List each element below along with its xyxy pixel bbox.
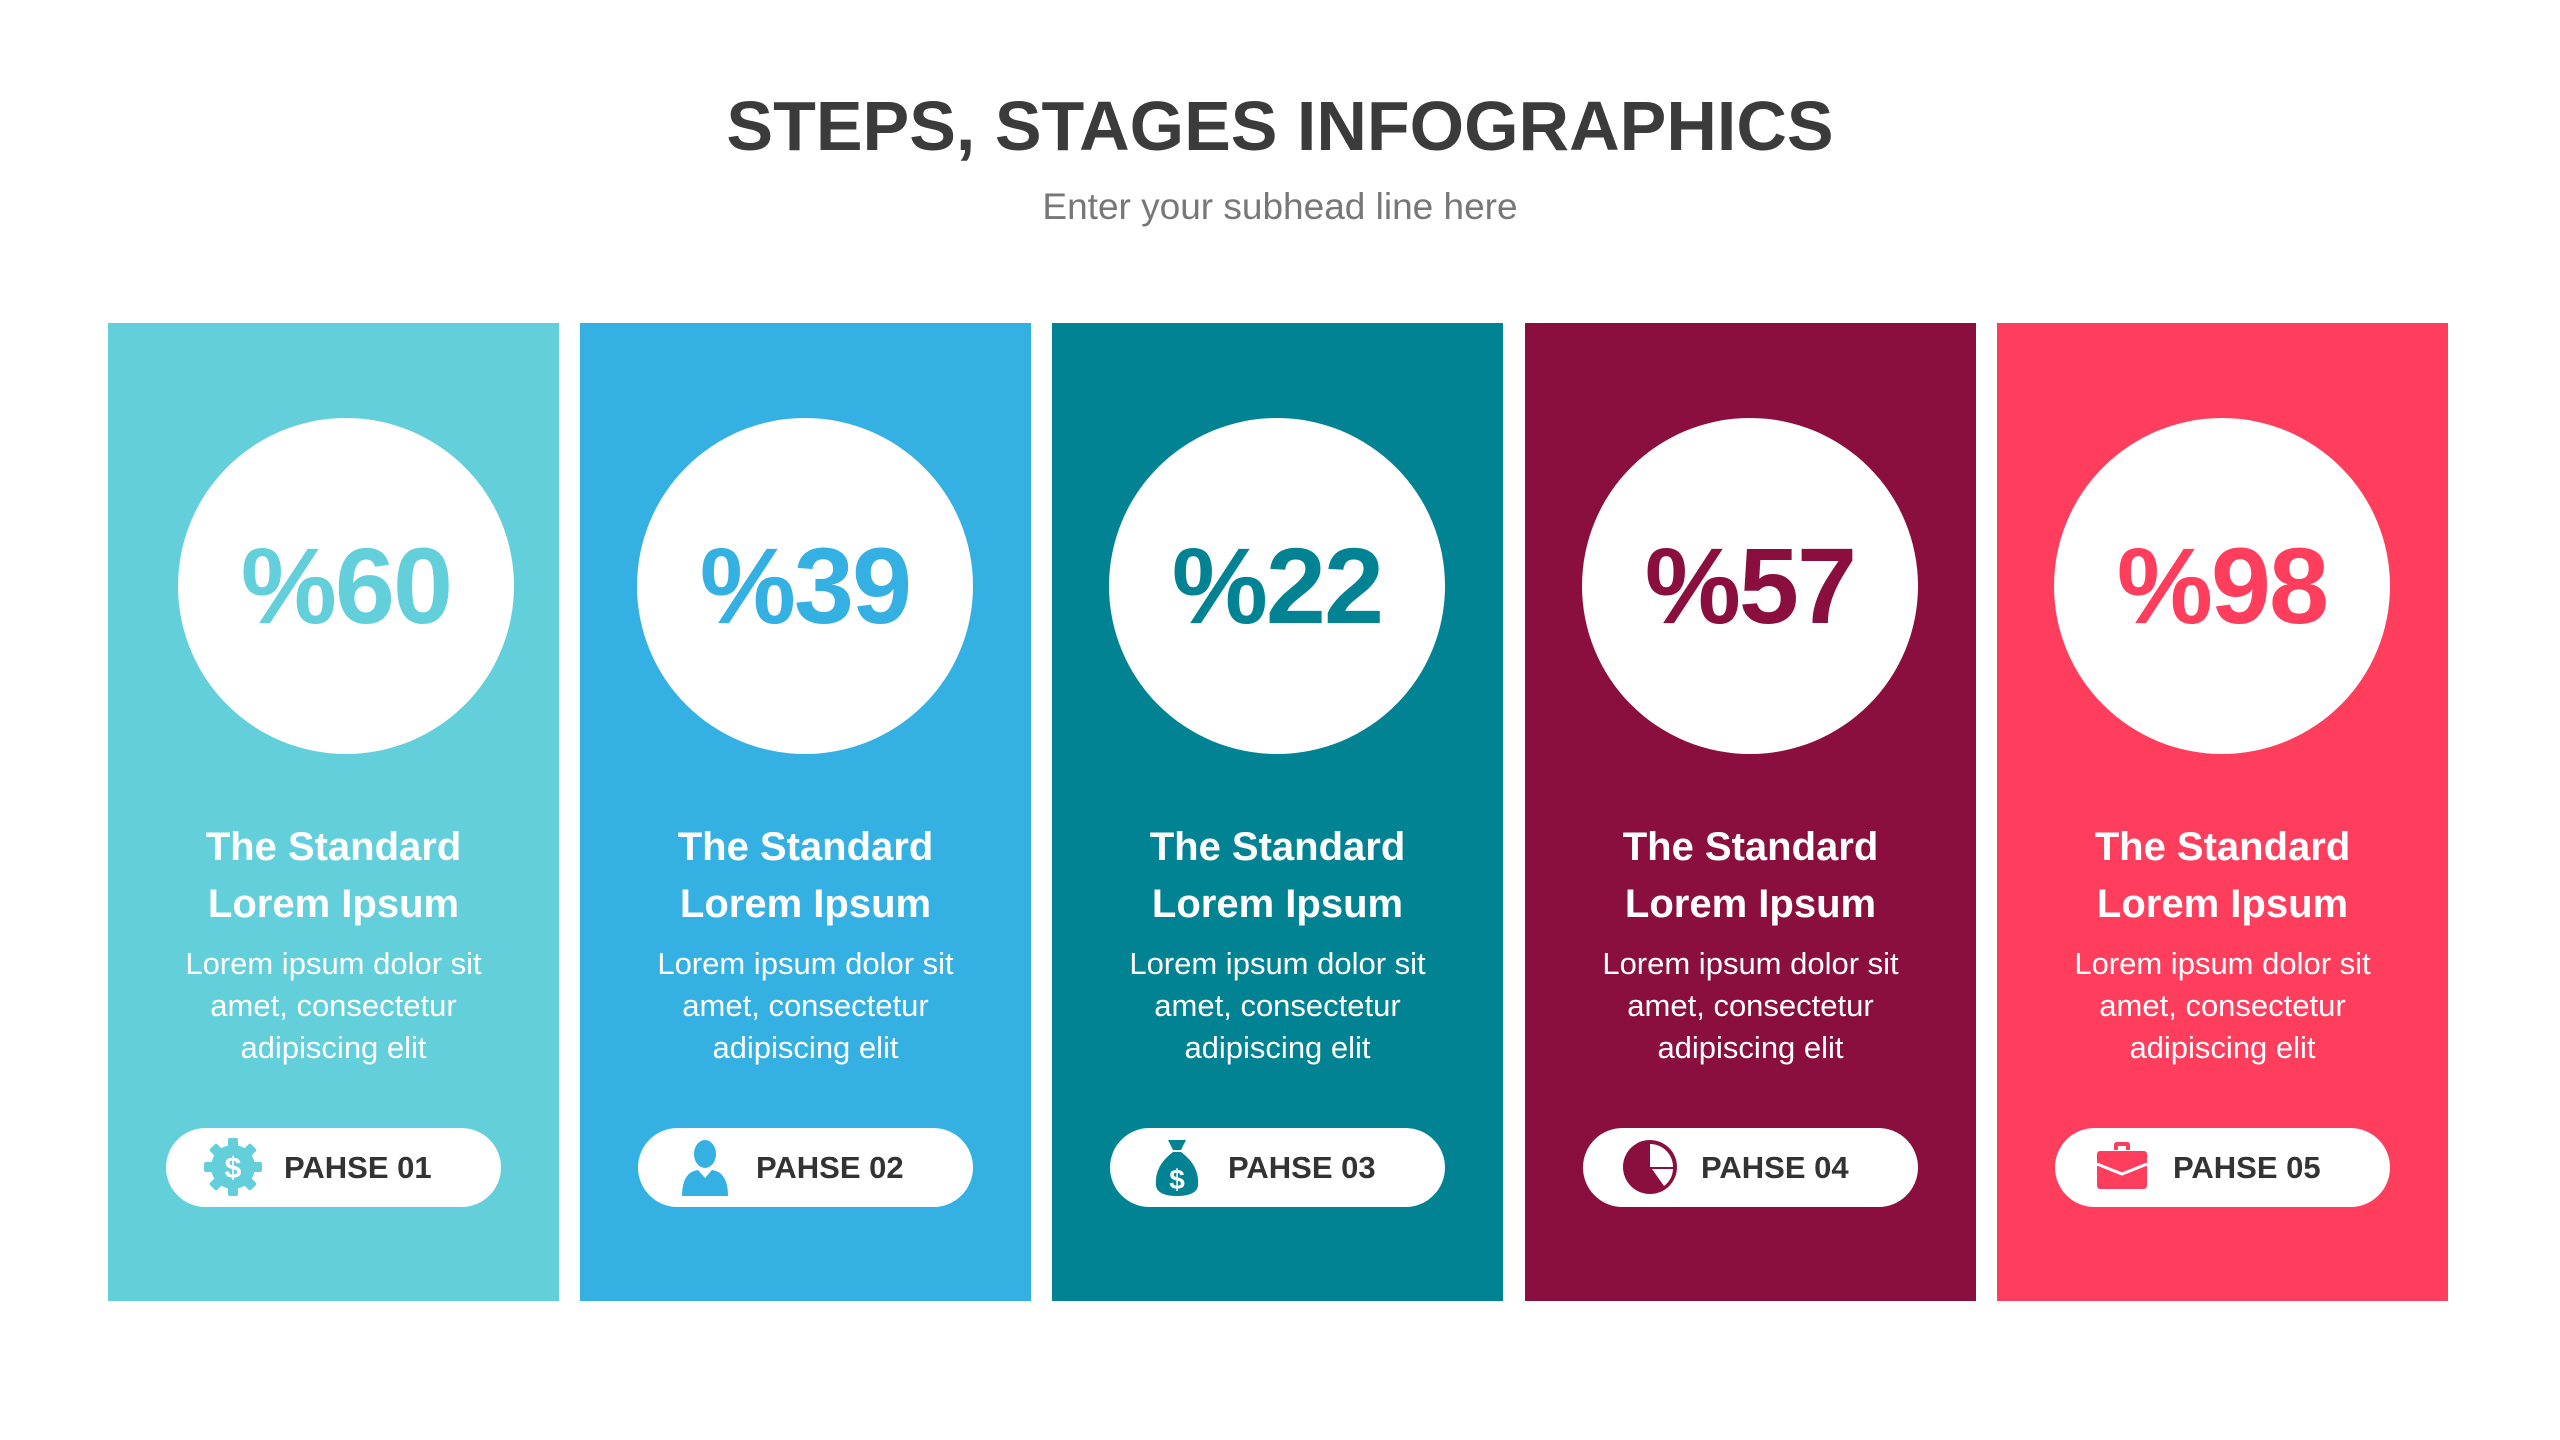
percent circle: %39 [700, 525, 910, 646]
panel: phase 05 [1997, 323, 2448, 1301]
body text: Lorem ipsum dolor sit [1129, 946, 1426, 981]
body text: adipiscing elit [1184, 1030, 1371, 1065]
body text [1129, 946, 1426, 1065]
heading [1623, 825, 1878, 926]
body text [657, 946, 954, 1065]
pill label [1583, 1128, 1918, 1207]
body text: amet, consectetur [682, 988, 929, 1023]
percent circle [637, 418, 973, 754]
body text: adipiscing elit [1657, 1030, 1844, 1065]
percent circle: %22 [1172, 525, 1382, 646]
heading [2095, 825, 2350, 926]
body text: amet, consectetur [2099, 988, 2346, 1023]
pill label [2055, 1128, 2390, 1207]
percent circle: %57 [1645, 525, 1855, 646]
percent circle [1582, 418, 1918, 754]
heading: Lorem Ipsum [1152, 882, 1403, 926]
pill label: PAHSE 02 [756, 1150, 904, 1185]
panel: phase 01 [108, 323, 559, 1301]
body text: Lorem ipsum dolor sit [657, 946, 954, 981]
pill label: $ [1169, 1164, 1185, 1195]
body text: adipiscing elit [2129, 1030, 2316, 1065]
percent circle: %60 [241, 525, 451, 646]
heading: The Standard [206, 825, 461, 869]
heading: Lorem Ipsum [680, 882, 931, 926]
heading: Lorem Ipsum [1625, 882, 1876, 926]
pill label [638, 1128, 973, 1207]
pill label: PAHSE 03 [1228, 1150, 1376, 1185]
body text: Lorem ipsum dolor sit [2074, 946, 2371, 981]
heading: The Standard [1150, 825, 1405, 869]
title: STEPS, STAGES INFOGRAPHICS [726, 87, 1834, 165]
body text: adipiscing elit [240, 1030, 427, 1065]
heading: Lorem Ipsum [2097, 882, 2348, 926]
pill label [1110, 1128, 1445, 1207]
body text: amet, consectetur [210, 988, 457, 1023]
panel: phase 04 [1525, 323, 1976, 1301]
heading: The Standard [2095, 825, 2350, 869]
body text: adipiscing elit [712, 1030, 899, 1065]
heading [206, 825, 461, 926]
body text: Lorem ipsum dolor sit [185, 946, 482, 981]
pill label: $ [225, 1152, 242, 1185]
pill label: PAHSE 05 [2173, 1150, 2321, 1185]
pill label [166, 1128, 501, 1207]
heading: The Standard [678, 825, 933, 869]
pill label: PAHSE 04 [1701, 1150, 1849, 1185]
heading: The Standard [1623, 825, 1878, 869]
heading [1150, 825, 1405, 926]
percent circle [2054, 418, 2390, 754]
subhead: Enter your subhead line here [1042, 186, 1518, 227]
body text [1602, 946, 1899, 1065]
percent circle [178, 418, 514, 754]
body text [185, 946, 482, 1065]
body text: amet, consectetur [1154, 988, 1401, 1023]
panel: phase 02 [580, 323, 1031, 1301]
panel: phase 03 [1052, 323, 1503, 1301]
heading: Lorem Ipsum [208, 882, 459, 926]
percent circle: %98 [2117, 525, 2327, 646]
body text: amet, consectetur [1627, 988, 1874, 1023]
pill label: PAHSE 01 [284, 1150, 432, 1185]
body text: Lorem ipsum dolor sit [1602, 946, 1899, 981]
heading [678, 825, 933, 926]
body text [2074, 946, 2371, 1065]
percent circle [1109, 418, 1445, 754]
